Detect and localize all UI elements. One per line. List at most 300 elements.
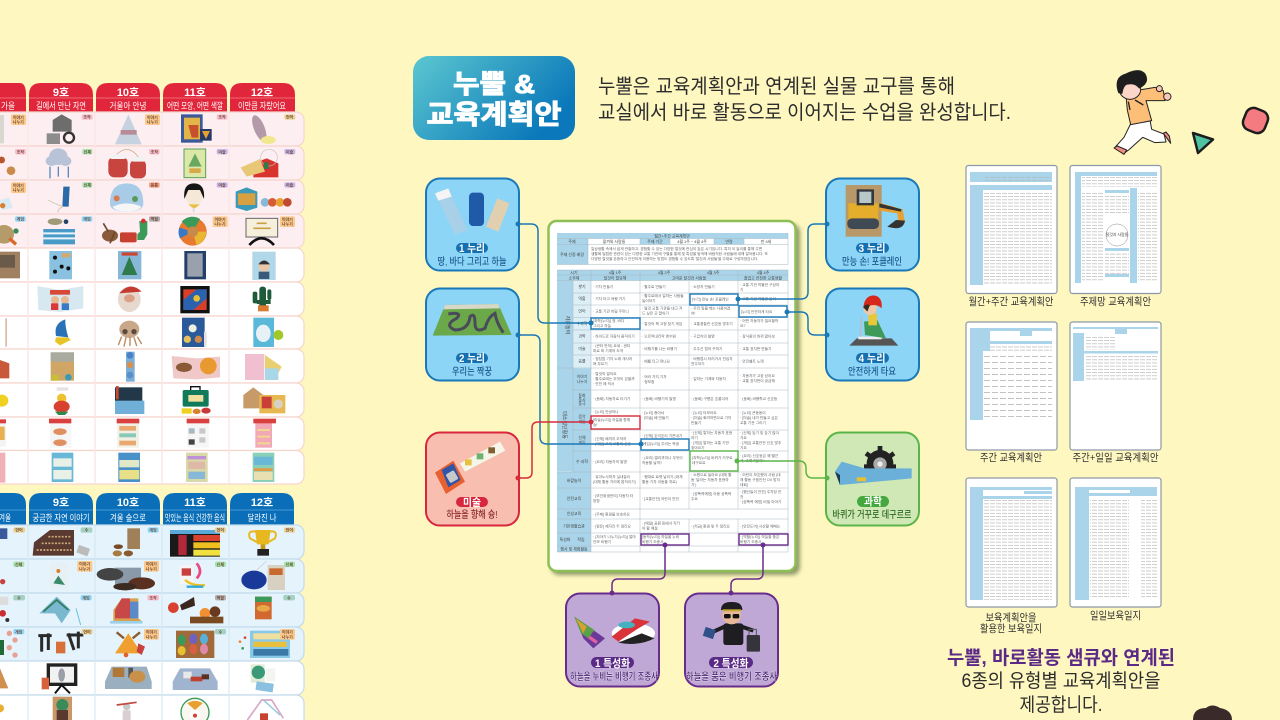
blue month tabs: 겨울 숲으로 xyxy=(110,513,146,523)
plan weekly table: · [역할(누리)] 하늘을 품은 xyxy=(740,534,780,539)
plan weekly table: 4월 1주 xyxy=(609,270,622,275)
blue row 4 items: 이야기 xyxy=(146,629,157,635)
icon: partial character hair at bottom xyxy=(1193,706,1232,720)
plan weekly table: 만들기 xyxy=(691,420,701,425)
plan weekly table: · 교통 기관 박물관 놀이 xyxy=(740,296,776,301)
connector: 미술 to plan xyxy=(516,420,594,480)
plan weekly table: · 배를 타고 떠나요 xyxy=(642,358,671,364)
blue row 1 items: 게임 xyxy=(149,527,157,533)
blue row 4 items: 나누기 xyxy=(282,633,293,639)
plan weekly table: 시기 xyxy=(570,270,578,275)
plan weekly table: 작동할 날까? xyxy=(642,460,662,465)
plan weekly table: 데구르르 xyxy=(692,460,706,465)
blue row 1 items: 언어 xyxy=(15,527,23,533)
red table items, lower rows xyxy=(0,286,285,483)
blue month tabs: 궁금한 자연 이야기 xyxy=(32,513,90,523)
plan weekly table: · 유아노사마차 실내놀이 xyxy=(593,474,630,479)
plan weekly table: · 교통 표지판이 궁금해 xyxy=(740,378,775,383)
row 2 items: 조작 xyxy=(17,148,24,154)
red table items, upper rows xyxy=(0,113,295,280)
plan weekly table: · 우주선 접어 꾸미기 xyxy=(691,346,722,351)
row 9 items xyxy=(0,386,285,415)
blue month tabs xyxy=(0,493,294,525)
plan weekly table: · 교통 기관 비밀 주머니 xyxy=(593,308,629,314)
plan weekly table: · (동화) 비행학교 신호등 xyxy=(740,396,778,401)
panel: 3 누리 card xyxy=(826,178,919,270)
red month tabs: 10호 xyxy=(117,86,139,99)
plan weekly table: 나누기 xyxy=(577,379,588,384)
closing text xyxy=(947,647,1175,716)
blue row 1 items xyxy=(0,527,295,557)
plan weekly table: 요? xyxy=(740,324,745,328)
row 3 items: 미술 xyxy=(286,182,294,188)
row 2 items xyxy=(0,148,295,178)
plan weekly table: · 안전벨트 노래 xyxy=(740,358,764,364)
panel: 2 특성화 card xyxy=(685,594,778,686)
plan weekly table: · 소방차 만들기 xyxy=(691,284,715,289)
plan weekly table: 게임 xyxy=(578,440,586,445)
row 3 items: 나누기 xyxy=(13,187,24,193)
panel: 2 누리 card: 우리는 짝꿍 xyxy=(452,366,492,378)
panel: plan type thumbnails xyxy=(966,166,1161,635)
icon: excavator xyxy=(846,185,905,237)
row 3 items: 신체 xyxy=(84,182,91,188)
row 4 items: 이야기 xyxy=(214,216,226,222)
row 4 items: 나누기 xyxy=(214,221,226,227)
red month tabs: 11호 xyxy=(184,86,206,99)
closing text: 6종의 유형별 교육계획안을 xyxy=(962,670,1160,692)
row 3 items: 미술 xyxy=(218,182,226,188)
plan weekly table: · 활주로에는 무엇이 있을까 xyxy=(593,376,635,381)
plan weekly table: 게임 xyxy=(578,419,586,424)
plan highlight boxes xyxy=(591,294,788,545)
plan weekly table: · [누리] 증아놔 xyxy=(642,410,665,415)
plan weekly table: · 오르락내리락 엔수럼 xyxy=(642,334,676,338)
plan weekly table: 양창 xyxy=(593,498,600,503)
plan weekly table: 드 싶은 곳 말하기 xyxy=(642,310,669,316)
plan weekly table: 역할 xyxy=(578,296,586,301)
panel: 1 특성화 card: 하늘을 누비는 비행기 조종사 xyxy=(570,670,658,683)
red month tabs: 길에서 만난 자연 xyxy=(36,101,86,111)
panel: 4 누리 card: 4 누리 xyxy=(858,352,886,365)
plan weekly table: 수·과학 xyxy=(576,459,588,464)
plan header rows: 주제 선정 배경 xyxy=(560,252,584,257)
plan weekly table: 행사 및 체험활동 xyxy=(560,546,588,552)
row 4 items: 나누기 xyxy=(282,221,293,227)
title badge: 누뿔 & xyxy=(453,69,535,99)
plan weekly table: 언어 xyxy=(578,308,586,314)
plan weekly table: 체 활동 구음안전 OX 맞히 xyxy=(740,477,780,482)
red month tabs: 12호 xyxy=(251,86,273,99)
plan weekly table: 동화 xyxy=(578,393,586,398)
plan weekly table: · [저금] 환경 및 두 정리요 xyxy=(691,524,731,528)
plan weekly table: · [안전도어] 사산할 예매는 xyxy=(740,524,781,528)
panel: 1 특성화 card xyxy=(566,594,659,686)
plan weekly table: · [성폭력예방] 아동 성폭력 xyxy=(691,491,731,496)
plan weekly table: · [행산놀이 안전] 주차장 안 xyxy=(740,489,782,494)
blue month tabs: 12호 xyxy=(251,496,273,509)
intro text: 교실에서 바로 활동으로 이어지는 수업을 완성합니다. xyxy=(598,101,1011,124)
plan weekly table: 소주제 xyxy=(569,276,580,280)
blue row 1 items: 언어 xyxy=(217,527,224,533)
thumbnail: theme web plan: 주제망 교육계획안 xyxy=(1080,296,1151,308)
connector: 4 누리 to plan xyxy=(784,310,830,338)
plan weekly table: · (동화) 구름은 호롱이야 xyxy=(691,396,729,401)
blue month tabs: 11호 xyxy=(184,496,206,509)
plan weekly table: 색, 초록색일까? xyxy=(740,458,764,463)
blue month tabs: 맛있는 음식 건강한 음식 xyxy=(165,512,225,523)
row 7 items xyxy=(5,318,283,347)
panel: 2 누리 card: 2 누리 xyxy=(459,352,485,365)
blue row 2 items: 나누기 xyxy=(79,565,90,571)
plan weekly table: 쌓기 xyxy=(578,284,586,289)
plan header rows: 4월 1주 ~ 4월 4주 xyxy=(677,239,707,244)
plan header rows: 생활에 밀접한 관련이 있는 다양한 교통 기관에 구별을 통해 및 특징을 탐색해 바람직한 사람들에 대해 알아봅니다. 또 xyxy=(591,251,768,256)
row 2 items: 미술 xyxy=(218,148,226,154)
blue row 4 items: 언어 xyxy=(83,628,91,634)
panel: lesson plan document xyxy=(548,221,800,575)
plan weekly table: 대소집단활동 xyxy=(561,411,568,439)
red table rows xyxy=(0,112,304,484)
plan weekly table: 전 xyxy=(740,494,744,499)
row 2 items: 미술 xyxy=(286,148,294,154)
blue row 3 items: 게임 xyxy=(82,594,90,600)
blue row 1 items: 수 xyxy=(84,527,88,533)
plan weekly table: · [신체] 배까지 조작하 xyxy=(593,436,627,441)
plan weekly table: · 정담없 기차 노래 개사하 xyxy=(593,356,633,361)
panel: 2 특성화 card: 하늘을 품은 비행기 조종사 xyxy=(686,670,777,683)
plan weekly table: 교통 기관 그리기 xyxy=(740,420,766,425)
thumbnail: weekly plan: 주간 교육계획안 xyxy=(980,452,1042,464)
plan weekly table: · 우리 앞을 책는 사용하겠 xyxy=(691,306,731,310)
panel: 3 누리 card: 만능 손! 포클레인 xyxy=(842,256,902,268)
blue row 3 items: 조작 xyxy=(149,594,157,600)
blue table rows xyxy=(0,525,304,720)
plan weekly table: 비행기 조종사 xyxy=(642,539,664,544)
blue row 4 items: 나누기 xyxy=(146,633,157,639)
plan weekly table: 며 부르기 xyxy=(593,361,608,366)
plan weekly table: · (동화) 비행기의 발명 xyxy=(642,396,676,401)
plan weekly table: 동시 xyxy=(578,397,586,402)
blue row 6 items xyxy=(0,697,283,720)
plan weekly table: · 활주로에서 일하는 사람들 xyxy=(642,293,684,298)
plan weekly table: · 비행접시 타러가서 전십자 xyxy=(691,356,733,361)
plan header rows: 맡겨와 사람들 xyxy=(603,239,626,244)
plan weekly table: · [게임] 고개 교통의 신호 xyxy=(593,441,632,446)
thumbnail: weekly and daily plan xyxy=(1070,322,1161,464)
plan weekly table: 자유놀이 xyxy=(564,316,571,334)
plan weekly table: · 교통 표지판 만들기 xyxy=(740,346,771,351)
plan weekly table: · [정돈] 제자리 두 정리요 xyxy=(593,524,632,528)
plan weekly table: [누리] 만능 손! 포클레인 xyxy=(692,296,729,302)
plan header rows: 주제 기간 xyxy=(647,239,663,244)
blue row 4 items: 이야기 xyxy=(282,629,293,635)
blue row 5 items xyxy=(0,663,275,693)
panel: 과학 card: 과학 xyxy=(864,494,882,508)
blue month tabs: 10호 xyxy=(117,496,139,509)
icon: road play board xyxy=(433,304,512,336)
panel: 1 누리 card xyxy=(426,178,519,270)
plan weekly table: · (큰타 만의) 요새 - 센터 xyxy=(593,343,630,348)
blue row 2 items: 신체 xyxy=(15,561,23,567)
plan weekly table: 주요 xyxy=(691,497,698,501)
row 3 items: 이야기 xyxy=(13,182,24,188)
blue row 2 items xyxy=(0,561,295,590)
plan weekly table: 음률 xyxy=(578,358,586,364)
red month tabs: 9호 xyxy=(53,86,69,99)
plan weekly table: · 장식용의 바퀴 알아보 xyxy=(740,334,775,338)
plan weekly table: · 구급차의 발명 xyxy=(691,334,715,338)
plan weekly table: [누리] 안전하게 타요 xyxy=(741,309,773,314)
icon: rocket launcher toy xyxy=(435,442,505,494)
row 1 items: 조작 xyxy=(218,114,226,120)
row 1 items: 나누기 xyxy=(147,119,158,125)
plan header rows: 월간+주간 교육계획안 xyxy=(654,233,690,238)
plan weekly table: · (동화) 자동차로 타기기 xyxy=(593,396,630,401)
plan weekly table: · [신체] 호리호리 기운내기 xyxy=(642,433,682,438)
plan weekly table: · 하이드로 자동차 움직이기 xyxy=(593,334,635,338)
plan weekly table: · [누리] 안녕하나 xyxy=(593,409,619,414)
thumbnail: daily care journal: 일일보육일지 xyxy=(1090,609,1141,622)
panel: 1 누리 card: 땅, 바다 그리고 하늘 xyxy=(438,255,506,268)
row 4 items: 역할 xyxy=(151,216,158,222)
blue row 4 items: 수 xyxy=(218,628,222,634)
intro text: 누뿔은 교육계획안과 연계된 실물 교구를 통해 xyxy=(598,75,955,98)
title badge xyxy=(413,56,575,140)
plan weekly table: 적립 xyxy=(577,537,585,542)
plan weekly table: 4월 4주 xyxy=(757,270,770,275)
plan weekly table: 미술 xyxy=(578,346,586,351)
row 11 items xyxy=(0,453,274,483)
plan weekly table xyxy=(557,270,788,552)
thumbnail: care journal using plan: 보육계획안을 xyxy=(986,612,1037,624)
red month tabs: 어떤 모양, 어떤 색깔 xyxy=(167,100,223,111)
plan weekly table: 수과학 xyxy=(577,321,588,326)
thumbnail: monthly and weekly plan xyxy=(966,166,1057,308)
panel: 2 누리 card xyxy=(426,288,519,380)
blue month tabs: 달라진 나 xyxy=(248,512,276,523)
plan weekly table: · [미술] 내가 만들고 싶은 xyxy=(740,415,779,420)
panel: 4 누리 card xyxy=(826,288,919,380)
plan weekly table: 연주하기 xyxy=(691,361,705,366)
plan weekly table: · 안전 에 적서 xyxy=(593,381,614,386)
plan weekly table: 음악 xyxy=(578,414,586,419)
plan header rows: 다양한 탈것을 존중하고 안전하게 이용하는 방법도 경험할 수 있도록 '탈것과 사람들'을 주제로 구성하였습니다. xyxy=(591,256,758,261)
plan header rows xyxy=(557,233,788,264)
red month tabs xyxy=(0,83,295,112)
red month tabs: 거울아 안녕 xyxy=(110,101,146,111)
blue row 3 items: 수 xyxy=(17,594,21,600)
blue row 4 items xyxy=(0,628,295,658)
row 5 items xyxy=(0,251,276,280)
plan header rows: 주제 xyxy=(568,239,576,244)
plan weekly table: · [교통안전] 어린이 안전 xyxy=(642,496,679,501)
plan weekly table: 인성교육 xyxy=(567,511,582,516)
plan weekly table: · (요리) 멀리까지나 무엇이 xyxy=(642,455,683,460)
icon: running character xyxy=(1114,71,1171,154)
connector: 3 누리 to plan xyxy=(736,222,830,302)
plan weekly table: · 정보점 xyxy=(642,379,654,384)
plan weekly table: (대체 활동 거리에 움직이기) xyxy=(593,479,636,484)
plan weekly table: 어! xyxy=(691,310,695,316)
blue row 2 items: 신체 xyxy=(217,561,224,567)
panel: 미술 card: 하늘을 향해 슝! xyxy=(446,508,498,521)
plan weekly table: 하기 xyxy=(691,435,698,440)
blue row 2 items: 나누기 xyxy=(146,565,157,571)
red month tabs: 가을 xyxy=(1,101,15,111)
blue row 2 items: 신체 xyxy=(286,561,293,567)
plan weekly table: · [미술] 화려하면으로 기차 xyxy=(691,415,732,420)
row 4 items: 게임 xyxy=(17,216,24,222)
plan weekly table: 고마운 탈것과 사람들 xyxy=(672,276,707,280)
plan weekly table: 특성화 xyxy=(560,537,571,542)
plan weekly table: · (요리) 신호등은 왜 빨간 xyxy=(740,453,779,458)
blue table items xyxy=(0,527,295,720)
plan weekly table: 기요 xyxy=(740,445,747,450)
thumbnail: daily care journal xyxy=(1070,478,1161,622)
red month tabs: 이만큼 자랐어요 xyxy=(238,100,286,111)
plan weekly table: 바깥놀이 xyxy=(567,478,582,483)
thumbnail: care journal using plan: 활용한 보육일지 xyxy=(980,622,1042,635)
plan weekly table: · 탈것 교통 기관을 대고 겨 xyxy=(642,306,682,310)
row 1 items: 조작 xyxy=(83,114,91,120)
panel: 과학 card xyxy=(826,432,919,526)
plan weekly table: 안보 비행기 xyxy=(593,539,611,544)
row 2 items: 신체 xyxy=(84,148,91,154)
panel: 1 누리 card: 1 누리 xyxy=(459,242,485,255)
panel: red curriculum table xyxy=(0,83,304,484)
plan weekly table: · 행대로 로켓 날리기 (대체 xyxy=(642,474,683,479)
plan weekly table: 기 xyxy=(740,287,743,292)
plan weekly table: 비행기 조종사 xyxy=(740,539,762,544)
plan weekly table: 슝! xyxy=(593,422,597,427)
plan weekly table: 탈것이 필요해 xyxy=(604,276,627,280)
plan weekly table: [과학(누리)] 땅, 바다 xyxy=(593,318,625,323)
closing text: 누뿔, 바로활동 샘큐와 연계된 xyxy=(947,647,1175,669)
row 2 items: 조작 xyxy=(151,148,158,154)
blue row 2 items: 이야기 xyxy=(146,561,157,567)
connector: 2 특성화 to plan xyxy=(728,542,766,596)
thumbnail: weekly plan xyxy=(966,322,1057,464)
plan weekly table: · [주제] 환경을 보호하요 xyxy=(593,512,630,516)
panel: 미술 card: 미술 xyxy=(463,496,481,509)
blue row 1 items: 언어 xyxy=(286,527,293,533)
row 4 items: 이야기 xyxy=(282,216,293,222)
thumbnail: care journal using plan xyxy=(966,478,1057,635)
icon: pink rounded square xyxy=(1241,106,1270,135)
plan weekly table: [과학(누리)] 바퀴가 거꾸로 xyxy=(692,455,733,460)
plan header rows: 연령 xyxy=(725,239,733,244)
plan header rows: 만 4세 xyxy=(761,239,772,244)
panel: 1 특성화 card: 1 특성화 xyxy=(595,656,630,670)
row 10 items xyxy=(0,419,276,448)
plan weekly table: · [누리] 큰동동이 xyxy=(740,410,766,415)
connector: 2 누리 to plan xyxy=(516,332,644,446)
row 3 items xyxy=(0,182,295,212)
row 1 items xyxy=(0,113,295,144)
plan weekly table: · [누리] 타보아요 xyxy=(691,410,717,415)
plan weekly table: 피로 떠 기계의 도착 xyxy=(593,348,624,353)
plan weekly table: · 자동차가 고장 났어요 xyxy=(740,373,775,378)
plan weekly table: 야 할 예절 xyxy=(642,526,658,530)
title badge: 교육계획안 xyxy=(426,100,562,130)
closing text: 제공합니다. xyxy=(1020,694,1102,716)
blue row 3 items: 수 xyxy=(287,594,291,600)
plan weekly table: · [성폭력 예방] 비밀 이야기 xyxy=(740,499,781,504)
plan weekly table: 동극 xyxy=(578,401,586,406)
plan weekly table: · 기차 만들기 xyxy=(593,284,613,289)
blue row 3 items: 역할 xyxy=(217,594,224,600)
plan weekly table: 가요 xyxy=(740,435,747,440)
plan weekly table: · [지야기 나누기(누리)] 얼마 xyxy=(593,534,636,539)
row 1 items: 나누기 xyxy=(13,119,24,125)
plan weekly table: [게임(누리)] 우리는 짝꿍 xyxy=(642,441,680,446)
plan weekly table: 신체 xyxy=(578,435,586,440)
plan weekly table: 안전교육 xyxy=(567,496,582,501)
row 1 items: 이야기 xyxy=(147,114,158,120)
plan weekly table: · 여러 가지 기차 xyxy=(642,374,667,379)
connector: 1 특성화 to plan xyxy=(610,542,668,596)
row 8 items xyxy=(0,352,282,382)
row 1 items: 언어 xyxy=(286,114,294,120)
panel: 2 특성화 card: 2 특성화 xyxy=(714,656,748,670)
row 4 items: 게임 xyxy=(83,216,91,222)
plan weekly table: 과학 xyxy=(578,334,586,338)
row 3 items: 음률 xyxy=(151,182,158,188)
plan weekly table: · [미술] 배 만들기 xyxy=(642,415,669,420)
plan weekly table: · 어떤 자동차가 필요할까 xyxy=(740,318,779,323)
blue row 3 items xyxy=(0,594,295,625)
plan weekly table: 그리고 하늘 xyxy=(593,323,612,328)
plan weekly table: 찾아요기 xyxy=(691,445,705,450)
panel: 4 누리 card: 안전하게 타요 xyxy=(848,365,896,378)
plan weekly table: · [신체] 높기 및 높기 많이 xyxy=(740,430,779,435)
plan weekly table: · (요리) 자동차의 발명 xyxy=(593,459,627,464)
plan weekly table: · 탈것의 책 고정 찾기 게임 xyxy=(642,321,682,326)
thumbnail: monthly and weekly plan: 월간+주간 교육계획안 xyxy=(968,296,1054,308)
thumbnail: theme web plan xyxy=(1070,166,1161,308)
plan weekly table: [미술(누리)] 하늘을 향해 xyxy=(593,417,630,422)
plan weekly table: 이야기 xyxy=(577,374,588,379)
plan weekly table: · [게임] 교통안전 신호 맞추 xyxy=(740,440,782,445)
plan weekly table: · 탈것의 알아요 xyxy=(593,371,617,376)
plan weekly table: [동작(누리)] 하늘을 누비 xyxy=(642,534,679,539)
connector: 1 누리 to plan xyxy=(516,222,594,326)
plan weekly table: 기본생활습관 xyxy=(563,524,585,528)
panel: 3 누리 card: 3 누리 xyxy=(858,242,886,255)
plan weekly table: 활동 기차 이동을 처로) xyxy=(642,479,677,484)
blue row 4 items: 게임 xyxy=(15,628,23,634)
plan weekly table: · [보건위생관리] 자동차 타 xyxy=(593,493,634,498)
plan weekly table: 즐겁고 안전한 교통생활 xyxy=(744,276,782,280)
icon: wheel box xyxy=(835,446,912,485)
row 1 items: 이야기 xyxy=(13,114,24,120)
icon: child on scooter xyxy=(849,295,898,346)
plan weekly table: · 교통경찰관 신호등 맞추기 xyxy=(691,321,733,326)
plan weekly table: · [예절] 공원 등에서 지키 xyxy=(642,520,680,526)
plan weekly table: · 일하는 기계와 자동차 xyxy=(691,376,726,381)
plan weekly table: · 교통 기관 박물관 구성하 xyxy=(740,282,780,287)
panel: 미술 card xyxy=(426,432,519,526)
icon: teal triangle xyxy=(1193,133,1213,153)
icon: three tubes xyxy=(435,188,509,235)
row 6 items xyxy=(37,286,271,313)
panel: blue curriculum table xyxy=(0,493,304,720)
plan weekly table: · 어린이 보호했어 사람 (대 xyxy=(740,472,781,477)
icon: paper planes xyxy=(574,617,655,648)
plan weekly table: · 소원으로 놀아요 (대체 활 xyxy=(691,472,732,477)
plan weekly table: 놀이하기 xyxy=(642,298,656,303)
